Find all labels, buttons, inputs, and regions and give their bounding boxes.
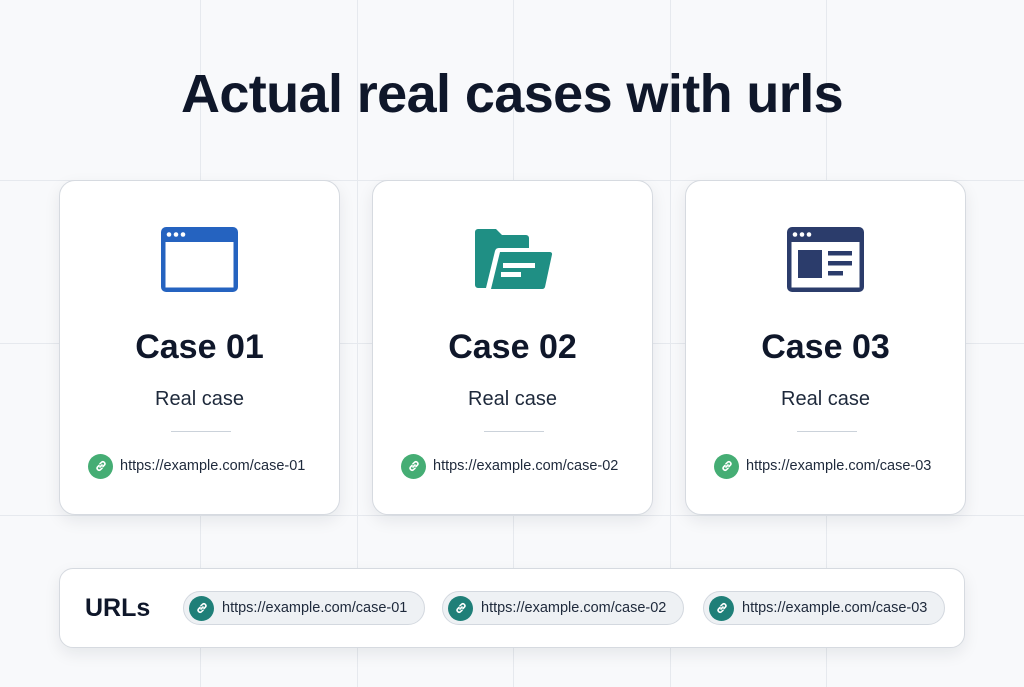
panel: URLs bar <box>59 568 965 648</box>
subtitle: Real case <box>155 388 244 410</box>
icon: browser window <box>161 227 238 292</box>
pill: url 02: https://example.com/case-02 <box>481 600 666 616</box>
pill: url 02 <box>442 591 684 625</box>
label: URLs: URLs <box>85 594 150 622</box>
subtitle: Real case <box>468 388 557 410</box>
panel: case 01 <box>59 180 340 515</box>
pill: url 03: https://example.com/case-03 <box>742 600 927 616</box>
case title: Case 03 <box>761 328 890 366</box>
link: https://example.com/case-01 <box>120 458 305 474</box>
link: https://example.com/case-02 <box>433 458 618 474</box>
icon: folder <box>475 229 552 289</box>
title: Actual real cases with urls <box>181 64 843 124</box>
panel: case 02 <box>372 180 653 515</box>
pill: url 01: https://example.com/case-01 <box>222 600 407 616</box>
panel: case 03 <box>685 180 966 515</box>
link <box>88 454 305 479</box>
link: https://example.com/case-03 <box>746 458 931 474</box>
subtitle: Real case <box>781 388 870 410</box>
link <box>401 454 618 479</box>
case title: Case 02 <box>448 328 577 366</box>
case title: Case 01 <box>135 328 264 366</box>
link <box>714 454 931 479</box>
icon: web page layout <box>787 227 864 292</box>
pill: url 01 <box>183 591 425 625</box>
pill: url 03 <box>703 591 945 625</box>
